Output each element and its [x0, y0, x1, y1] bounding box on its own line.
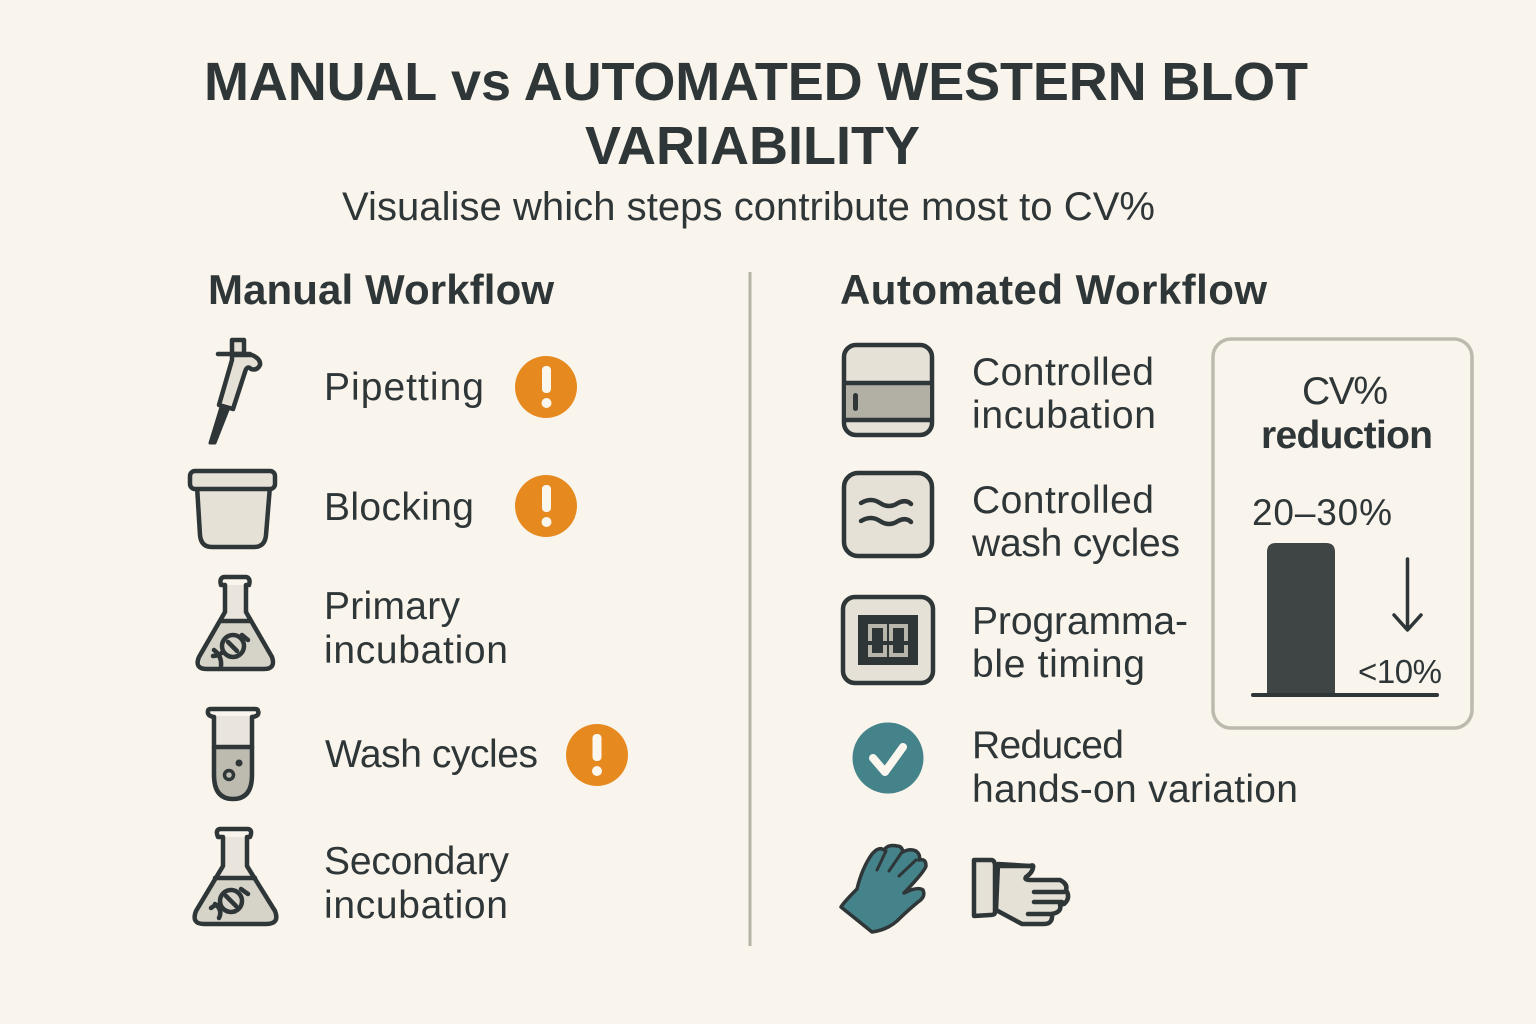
label: pipetting: Pipetting [324, 366, 484, 409]
icon: wash test tube [208, 709, 258, 799]
icon: primary incubation flask [198, 577, 273, 669]
label: blocking: Blocking [324, 486, 474, 529]
panel: CV% reduction [1213, 339, 1472, 728]
label: 20–30%: 20–30% [1252, 492, 1392, 533]
label: controlled incubation [972, 351, 1156, 437]
icon: warning [566, 724, 628, 786]
label: primary incubation: incubation [324, 629, 508, 672]
label: primary incubation: Primary [324, 585, 460, 628]
title [204, 52, 1308, 176]
panel: automated workflow [840, 266, 1298, 932]
label: secondary incubation: incubation [324, 884, 508, 927]
label: secondary incubation [324, 840, 510, 927]
label: primary incubation [324, 585, 508, 672]
axis [1253, 693, 1437, 697]
heading: CV% reduction [1261, 370, 1433, 457]
icon: secondary incubation flask [195, 829, 276, 924]
label: <10%: <10% [1358, 653, 1442, 690]
title: VARIABILITY [585, 116, 920, 176]
icon: warning [515, 356, 577, 418]
label: programmable timing: Programma- [972, 600, 1188, 643]
icon: hand [974, 860, 1068, 924]
label: controlled incubation: Controlled [972, 351, 1154, 394]
subtitle: Visualise which steps contribute most to CV% [342, 185, 1155, 229]
icon: wash waves [844, 473, 932, 556]
label: secondary incubation: Secondary [324, 840, 510, 883]
arrow: down [1394, 559, 1421, 630]
label: reduced hands-on variation [972, 724, 1298, 811]
heading: automated workflow: Automated Workflow [840, 266, 1267, 313]
label: controlled wash cycles: wash cycles [971, 522, 1180, 565]
icon: warning [515, 475, 577, 537]
label: controlled incubation: incubation [972, 394, 1156, 437]
icon: timer [843, 597, 933, 683]
label: controlled wash cycles: Controlled [972, 479, 1154, 522]
panel: manual workflow [190, 266, 628, 927]
icon: blocking tray [190, 471, 275, 547]
heading: manual workflow: Manual Workflow [208, 266, 554, 313]
label: controlled wash cycles [971, 479, 1180, 565]
label: wash cycles: Wash cycles [325, 733, 538, 776]
bar [1267, 543, 1335, 696]
title: MANUAL vs AUTOMATED WESTERN BLOT [204, 52, 1308, 112]
heading: CV% reduction: reduction [1261, 414, 1433, 457]
label: reduced hands-on variation: hands-on variation [972, 768, 1298, 811]
icon: check [852, 722, 924, 794]
icon: pipette [210, 340, 260, 443]
icon: glove [841, 846, 926, 932]
label: programmable timing: ble timing [972, 643, 1145, 686]
label: programmable timing [972, 600, 1188, 686]
label: reduced hands-on variation: Reduced [972, 724, 1124, 767]
icon: incubator [844, 345, 932, 435]
heading: CV% reduction: CV% [1302, 370, 1388, 413]
